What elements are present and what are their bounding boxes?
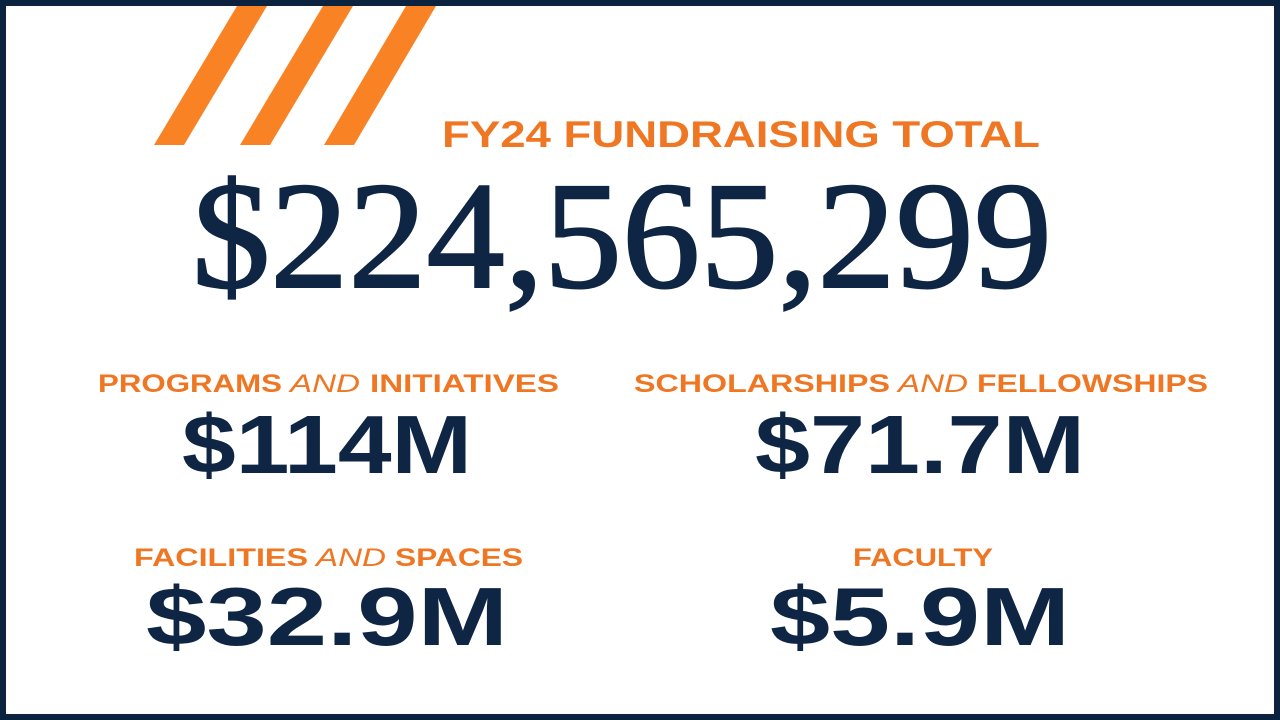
stat: scholarships and fellowships: FELLOWSHIPS bbox=[977, 370, 1208, 398]
stat: scholarships and fellowships: $71.7M bbox=[755, 398, 1085, 491]
stat: faculty: FACULTY bbox=[853, 544, 993, 572]
stat: programs and initiatives bbox=[98, 370, 559, 491]
stat: facilities and spaces: AND bbox=[313, 544, 386, 572]
stat: facilities and spaces: FACILITIES bbox=[134, 544, 308, 572]
stat: facilities and spaces: $32.9M bbox=[146, 570, 508, 663]
stat: faculty: $5.9M bbox=[770, 570, 1070, 663]
stat: programs and initiatives: AND bbox=[287, 370, 360, 398]
stat: programs and initiatives: PROGRAMS bbox=[98, 370, 282, 398]
decorative orange stripes bbox=[154, 6, 436, 145]
total amount: $224,565,299 bbox=[192, 152, 1052, 321]
stat: scholarships and fellowships: AND bbox=[895, 370, 968, 398]
stat: programs and initiatives: INITIATIVES bbox=[370, 370, 559, 398]
stat: facilities and spaces: SPACES bbox=[395, 544, 523, 572]
stat: facilities and spaces bbox=[134, 544, 523, 663]
title: FY24 FUNDRAISING TOTAL bbox=[442, 114, 1040, 155]
stat: scholarships and fellowships: SCHOLARSHIPS bbox=[634, 370, 890, 398]
stat: programs and initiatives: $114M bbox=[182, 398, 472, 491]
stat: scholarships and fellowships bbox=[634, 370, 1208, 491]
stat: faculty bbox=[770, 544, 1070, 663]
